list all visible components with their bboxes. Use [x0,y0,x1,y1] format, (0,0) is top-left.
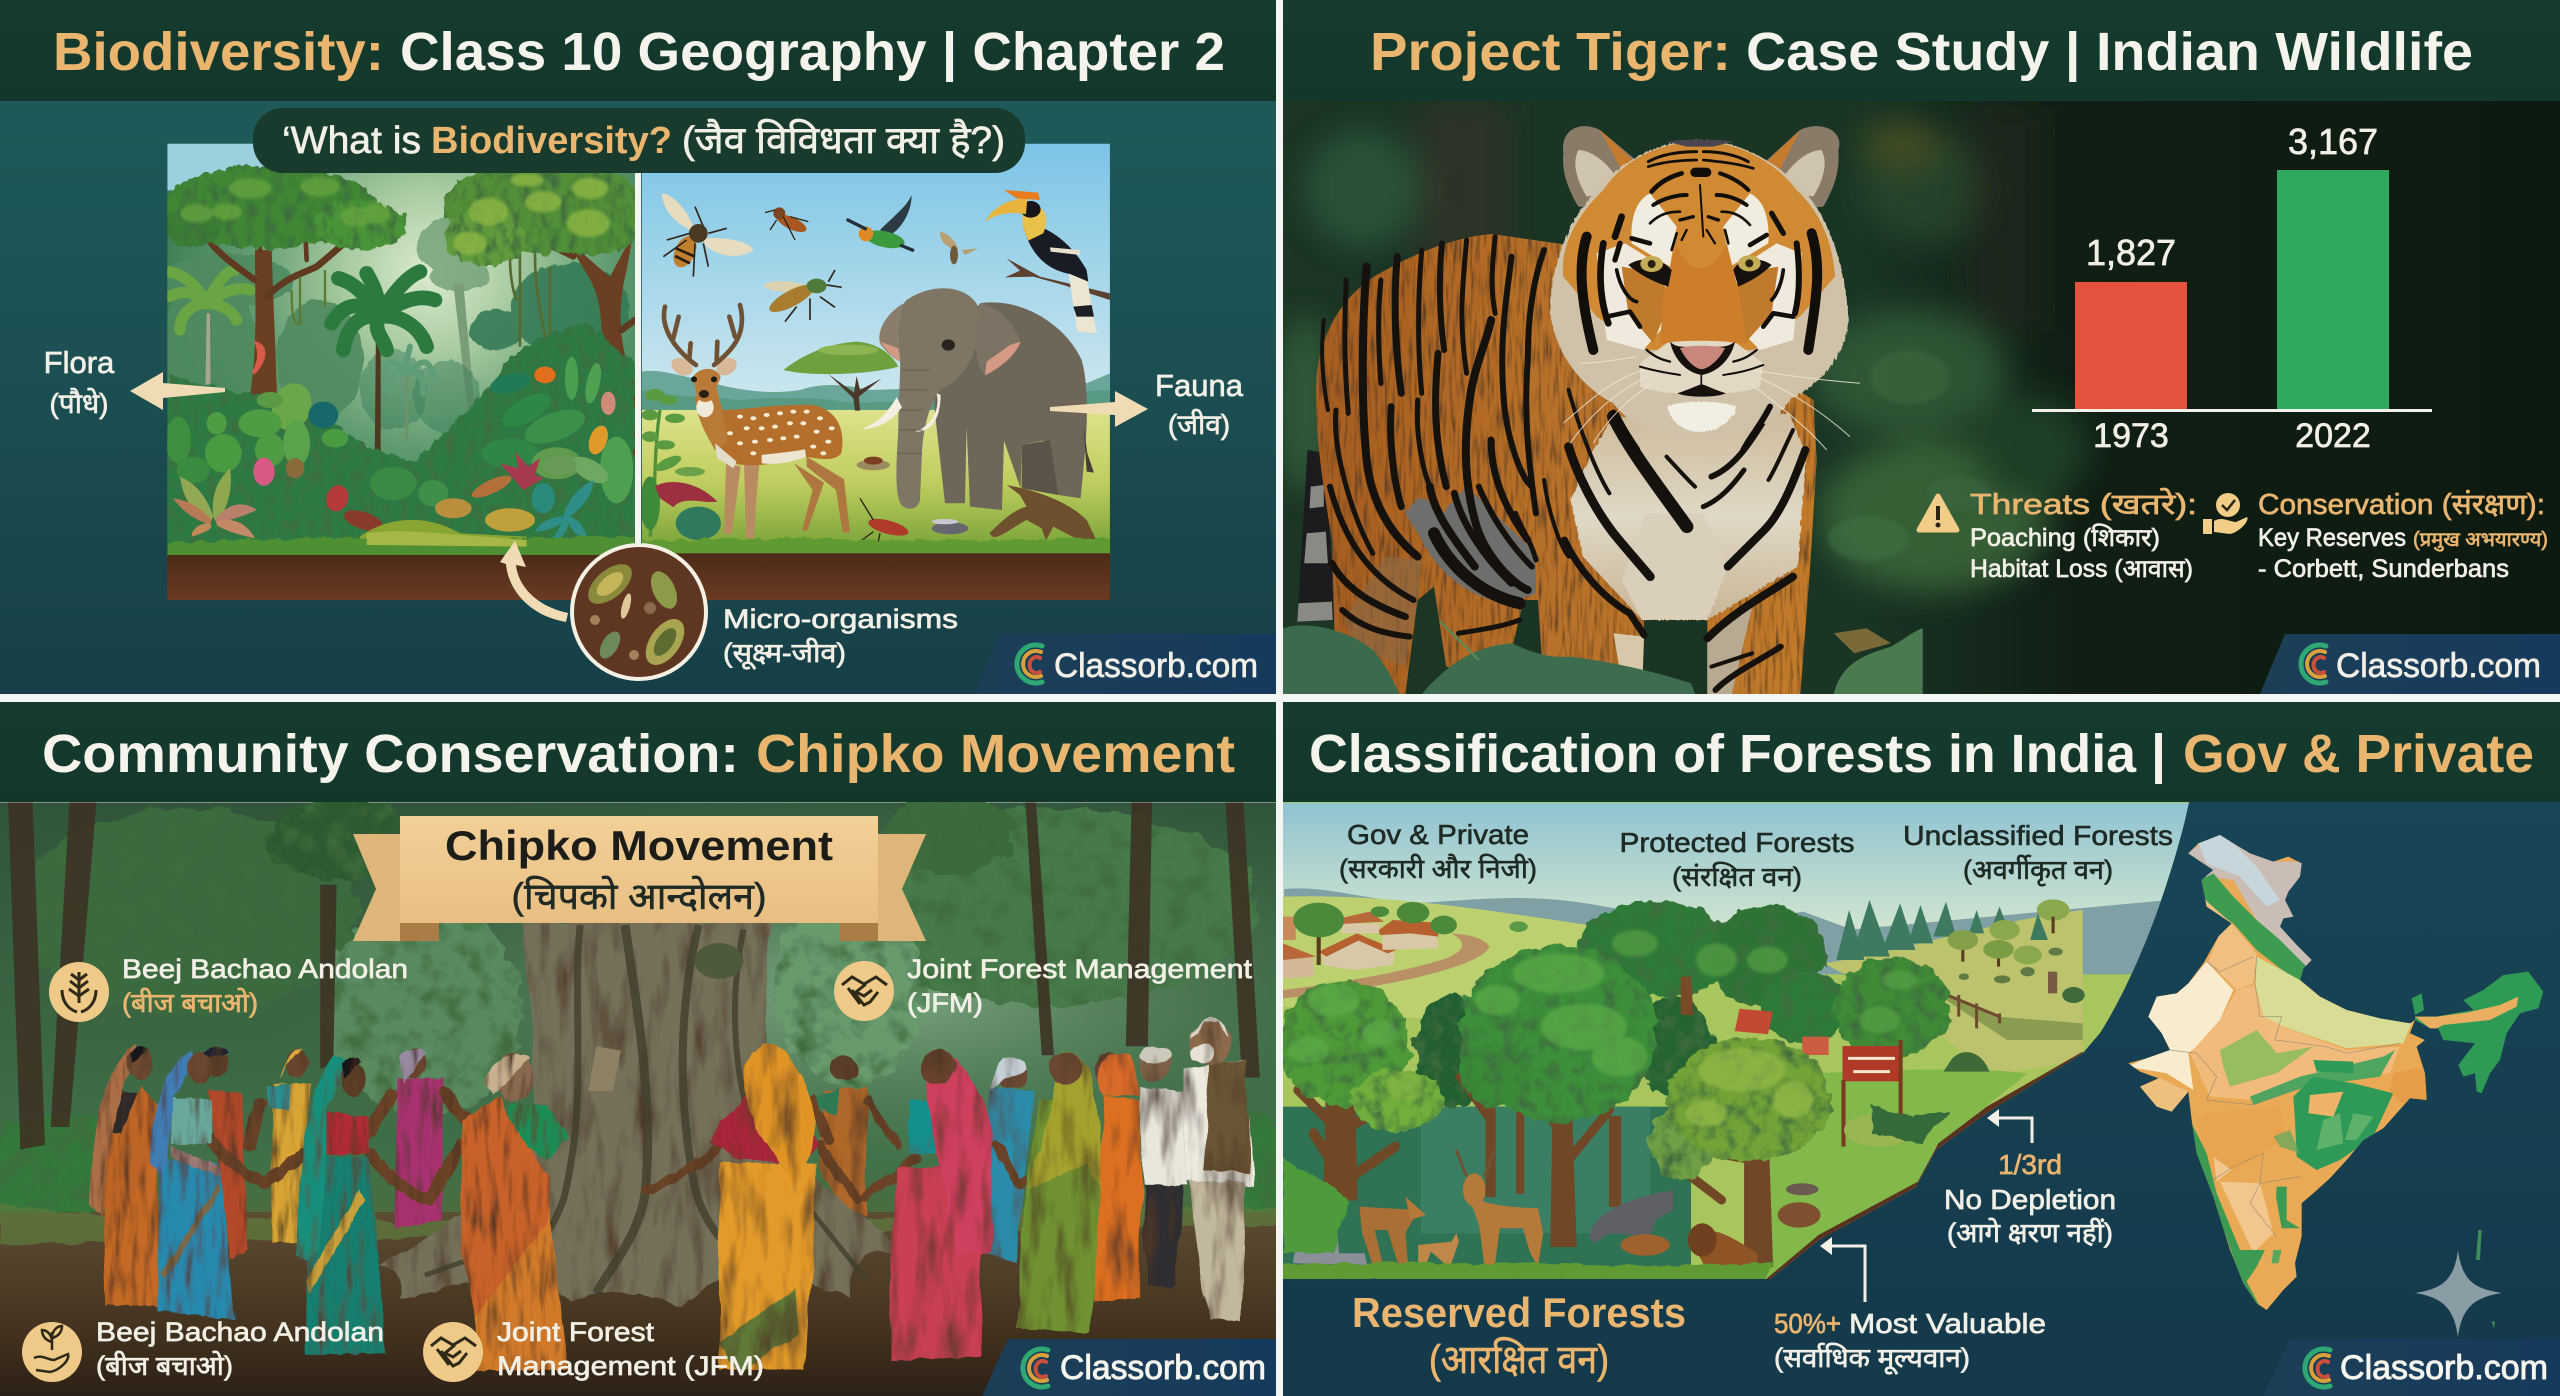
logo: Classorb.com [2260,634,2560,694]
logo: Classorb.com: Classorb.com [2336,647,2541,685]
label: fauna: (जीव) [1168,408,1230,440]
feature: Beej Bachao bottom: Beej Bachao Andolan [96,1317,384,1347]
logo: Classorb.com [982,1339,1276,1396]
banner: chipko movement: (चिपको आन्दोलन) [512,875,766,917]
bar chart: tiger population [2032,121,2432,455]
logo: Classorb.com: Classorb.com [1054,647,1258,685]
label: unclassified forests: Unclassified Forests [1903,820,2173,851]
heading bar: classification of forests: Gov & Private [2183,724,2534,784]
village [1283,933,1490,998]
feature: Joint Forest Management bottom: Joint Forest [497,1317,655,1347]
feature: Beej Bachao top: Beej Bachao Andolan [122,954,408,984]
text block: conservation: - Corbett, Sunderbans [2258,555,2509,583]
small creatures [857,457,1097,542]
logo: Classorb.com: Classorb.com [2340,1349,2548,1387]
label: flora [44,345,115,419]
left plant [650,410,660,537]
bar chart: tiger population: 1,827 [2086,232,2176,273]
feature: Beej Bachao bottom [22,1317,384,1382]
logo: Classorb.com [975,634,1276,694]
feature: Joint Forest Management top: (JFM) [907,988,983,1018]
divider between flora and fauna [635,143,641,548]
icon: warning [1919,496,1957,530]
label: fauna [1157,374,1244,440]
panel: classification of forests [1278,702,2560,1396]
heading bar: community conservation: Chipko Movement [756,724,1235,784]
bar chart: tiger population: 1973 [2093,417,2169,455]
icon: micro-organisms magnifier [570,543,708,681]
callout text: one third no depletion [1944,1149,2116,1248]
feature: Joint Forest Management bottom: Management (JFM) [497,1351,764,1381]
bar chart: tiger population: 2022 [2295,417,2371,455]
label: micro-organisms: (सूक्ष्म-जीव) [723,637,846,670]
bar: 2022 [2277,170,2389,411]
callout text: one third no depletion: 1/3rd [1998,1149,2062,1180]
bar: 1973 [2075,282,2187,411]
illustration: forest land scene [1278,802,2193,1282]
label: gov and private: Gov & Private [1347,819,1529,850]
icon: sparkle watermark [2415,1250,2502,1337]
foreground foliage [1283,622,1923,694]
callout arrowhead [1820,1237,1832,1255]
feature: Beej Bachao bottom: (बीज बचाओ) [96,1350,233,1381]
label: micro-organisms [723,604,958,670]
callout pill: what is biodiversity: (जैव विविधता क्या है?) [682,118,1005,162]
banner: chipko movement: Chipko Movement [445,822,833,869]
arrow: fauna [1050,391,1148,427]
heading bar: biodiversity: Class 10 Geography | Chapter 2 [400,22,1225,83]
text block: conservation: Conservation (संरक्षण): [2258,489,2545,521]
label: reserved forests [1352,1289,1686,1382]
callout arrow: reserved 50 percent [1824,1246,1865,1302]
label: fauna: Fauna [1155,368,1244,403]
label: gov and private [1339,819,1537,884]
arrow: flora [130,372,225,410]
logo: Classorb.com [2263,1339,2560,1396]
feature: Joint Forest Management top: Joint Forest Management [907,954,1253,984]
illustration: tiger body [1297,234,1817,694]
label: protected forests: (संरक्षित वन) [1672,861,1802,892]
north-east [2412,972,2543,1093]
label: flora: Flora [44,345,115,380]
callout pill: what is biodiversity: Biodiversity? [431,120,672,162]
panel: community conservation chipko [0,702,1291,1396]
bar chart: tiger population: 3,167 [2288,121,2378,162]
elephant [862,288,1094,510]
acacia [828,374,882,411]
heading bar: biodiversity: Biodiversity: [53,22,384,82]
animals [1293,1150,1821,1270]
feature: Joint Forest Management bottom [423,1317,764,1382]
heading bar: community conservation: Community Conservation: [42,724,739,784]
hornbill [985,190,1110,333]
callout text: 50 percent most valuable [1774,1308,2046,1375]
arrow: micro-organisms to soil [500,541,568,622]
label: micro-organisms: Micro-organisms [723,604,958,634]
banner: chipko movement [353,816,926,941]
illustration: women and men on the right [645,1017,1254,1374]
text block: threats: Poaching (शिकार) [1970,523,2160,552]
main trees [1298,1067,1793,1267]
callout pill: what is biodiversity [253,108,1025,173]
heading bar: project tiger: Project Tiger: [1370,22,1731,82]
map: India forest cover [2120,830,2543,1328]
callout text: 50 percent most valuable: (सर्वाधिक मूल्यवान) [1774,1342,1970,1375]
callout text: one third no depletion: (आगे क्षरण नहीं) [1947,1217,2113,1248]
signs [1735,1009,1903,1147]
illustration: women on the left holding hands [89,1044,569,1370]
heading bar: project tiger [1283,0,2560,101]
callout arrow: one third [1991,1118,2032,1143]
icon: conservation hand [2203,493,2248,534]
label: unclassified forests: (अवर्गीकृत वन) [1963,854,2113,887]
callout text: 50 percent most valuable: Most Valuable [1849,1308,2046,1339]
text block: conservation: (प्रमुख अभयारण्य) [2413,529,2548,552]
insects and bird [662,193,978,322]
label: flora: (पौधे) [49,387,109,419]
text block: conservation [2258,489,2548,583]
callout arrowhead [1987,1109,1999,1127]
label: protected forests [1620,827,1854,892]
label: reserved forests: Reserved Forests [1352,1289,1686,1336]
text block: threats: Threats (खतरे): [1970,488,2197,521]
heading bar: classification of forests [1283,702,2560,802]
illustration: tiger head [1550,126,1860,450]
background: blurred forest [1272,103,2089,593]
heading bar: project tiger: Case Study | Indian Wildlife [1746,22,2473,83]
feature: Joint Forest Management top [834,954,1253,1021]
label: unclassified forests [1903,820,2173,887]
text block: threats: Habitat Loss (आवास) [1970,555,2193,583]
deer [664,305,850,538]
callout pill: what is biodiversity: ‘What is [282,120,421,162]
back trees [1283,1107,1691,1280]
illustration: forest flora scene [160,144,643,600]
land details [1278,896,2085,1280]
sky and hills [1280,803,2191,974]
feature: Beej Bachao top: (बीज बचाओ) [122,987,258,1018]
heading bar: classification of forests: Classification of Forests in India | [1309,724,2166,785]
illustration: fauna scene [640,144,1110,600]
text block: conservation: Key Reserves [2258,524,2406,552]
heading bar: biodiversity [0,0,1276,101]
heading bar: community conservation [0,702,1276,802]
text block: threats [1970,488,2197,583]
panel: what is biodiversity [0,0,1276,694]
panel: project tiger [1272,0,2560,694]
illustration: forest and tree scene [0,795,1291,1396]
callout text: 50 percent most valuable: 50%+ [1774,1308,1841,1339]
feature: Beej Bachao top [49,954,408,1022]
logo: Classorb.com: Classorb.com [1060,1349,1266,1387]
callout text: one third no depletion: No Depletion [1944,1184,2116,1215]
label: gov and private: (सरकारी और निजी) [1339,853,1537,884]
label: protected forests: Protected Forests [1620,827,1854,858]
label: reserved forests: (आरक्षित वन) [1429,1337,1609,1382]
